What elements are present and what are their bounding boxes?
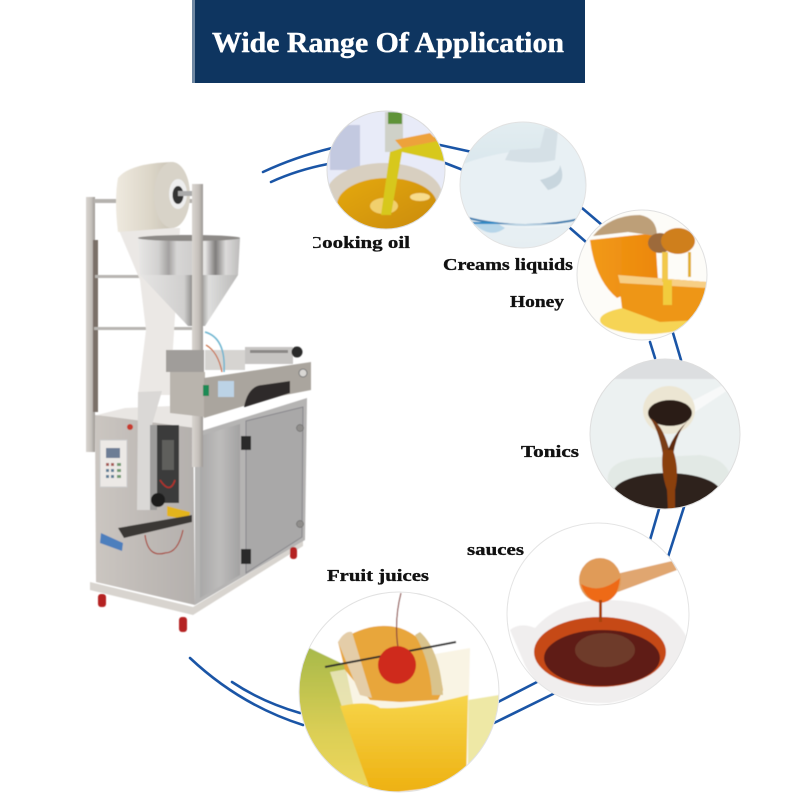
green background [300, 648, 370, 788]
base frame [90, 541, 303, 615]
upper axle [94, 199, 194, 203]
cross bars [94, 275, 193, 330]
machine [86, 162, 311, 632]
glass [330, 648, 470, 766]
label: sauces: sauces [467, 540, 524, 559]
label: cooking oil: Cooking oil [307, 233, 410, 252]
title banner [192, 0, 585, 83]
juice circle border [299, 592, 499, 792]
food circle: creams [459, 122, 590, 250]
cream circle border [460, 122, 586, 248]
sauces circle border [507, 523, 689, 705]
door latches [296, 424, 304, 528]
cream dish edge [468, 218, 584, 225]
food circle: honey [586, 214, 706, 335]
film roll [116, 162, 194, 232]
cherry [397, 593, 401, 648]
red wire [145, 530, 183, 554]
emergency button [127, 424, 133, 430]
wooden spoon [579, 558, 677, 622]
cabinet left door [200, 424, 240, 598]
hopper [138, 235, 240, 326]
bag former [137, 391, 162, 510]
label: honey: Honey [510, 292, 565, 311]
wheels [98, 547, 297, 632]
door hinges [241, 436, 251, 564]
tonic stream [662, 450, 677, 510]
pump housing [170, 362, 311, 418]
tonics circle border [590, 359, 740, 509]
control panel [100, 440, 127, 487]
orange slice [338, 626, 443, 702]
honey circle border [577, 210, 707, 340]
oil circle border [327, 111, 445, 229]
label: creams liquids: Creams liquids [443, 255, 573, 274]
oil bowl [330, 162, 442, 203]
left cabinet face [95, 415, 195, 605]
label: fruit juices: Fruit juices [327, 566, 429, 585]
cabinet right door [246, 407, 303, 573]
film web [118, 228, 180, 395]
right frame post [192, 184, 203, 467]
ladle [642, 386, 726, 454]
food circle: tonics [590, 359, 740, 513]
conveyor [118, 515, 192, 538]
food circle: cooking oil [326, 111, 446, 232]
dark slot in post [93, 240, 98, 412]
right cabinet face [195, 398, 307, 605]
honey jar [590, 233, 658, 298]
skewer [325, 642, 456, 667]
oil stream and bottle [381, 135, 446, 215]
sealing unit [150, 425, 179, 510]
food circle: sauces [510, 539, 686, 703]
honey comb [618, 275, 707, 322]
blue sticker [100, 533, 123, 551]
filling piston unit [166, 332, 302, 372]
blue connecting arcs [190, 145, 684, 725]
yellow label [167, 506, 190, 520]
honey puddle [600, 306, 694, 334]
sauce bowl [510, 600, 688, 703]
cabinet top platform [97, 406, 205, 428]
juice [340, 695, 468, 795]
pale background [467, 694, 498, 764]
title text: Wide Range Of Application [212, 28, 564, 59]
label: tonics: Tonics [521, 442, 579, 461]
food circle: fruit juice [299, 592, 499, 795]
cream swirl [460, 138, 586, 225]
door outline [246, 407, 303, 573]
left frame post [86, 197, 95, 452]
tonic bowl [608, 456, 728, 488]
honey dipper [648, 228, 695, 305]
